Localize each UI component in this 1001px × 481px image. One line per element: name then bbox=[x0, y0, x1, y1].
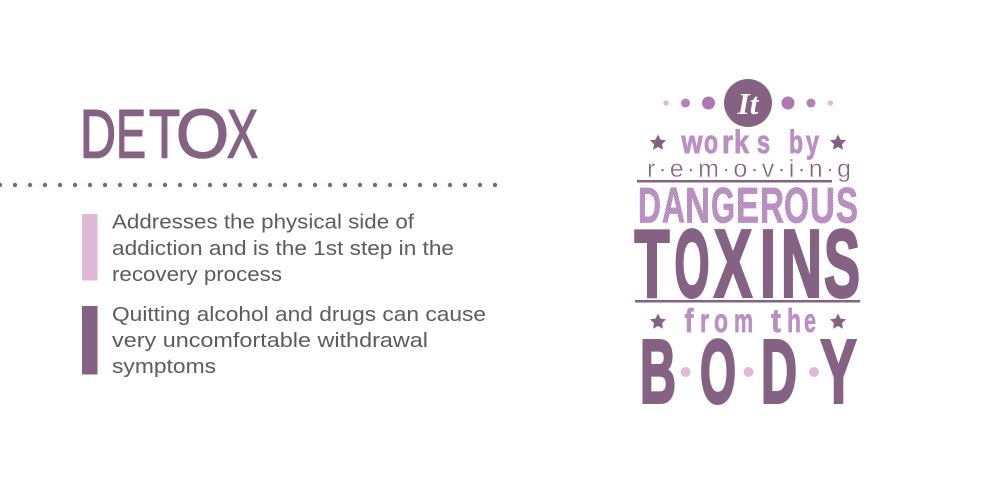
text: works by: o bbox=[704, 124, 718, 160]
text: DANGEROUS: N bbox=[685, 178, 710, 234]
text: from the: m bbox=[734, 302, 753, 339]
text: BODY: D bbox=[761, 322, 797, 422]
text: DANGEROUS: D bbox=[638, 178, 661, 234]
text: works by: k bbox=[734, 124, 749, 160]
icon: stars beside from the bbox=[650, 314, 846, 329]
text: from the: e bbox=[804, 302, 816, 339]
icon: circle badge with It bbox=[724, 79, 772, 127]
text: DANGEROUS: E bbox=[736, 178, 759, 234]
text: from the: h bbox=[787, 302, 801, 339]
heading: DETOX: E bbox=[116, 95, 146, 172]
text: works by: y bbox=[806, 124, 819, 160]
text: TOXINS: O bbox=[674, 210, 710, 318]
rule under TOXINS bbox=[635, 300, 860, 302]
icon: circle badge with It: It bbox=[737, 86, 760, 121]
bullet 2 text: very uncomfortable withdrawal bbox=[112, 330, 428, 352]
typographic poster bbox=[634, 79, 860, 422]
text: DANGEROUS: U bbox=[810, 178, 835, 234]
text: DANGEROUS: R bbox=[760, 178, 784, 234]
dark bar bbox=[82, 306, 98, 374]
heading: DETOX: T bbox=[149, 95, 180, 172]
text: works by: b bbox=[789, 124, 803, 160]
text: TOXINS: I bbox=[760, 210, 776, 318]
bullet 2 text: Quitting alcohol and drugs can cause bbox=[112, 304, 486, 326]
text: DANGEROUS: G bbox=[711, 178, 735, 234]
text: TOXINS: N bbox=[781, 210, 822, 318]
bullet 1 text: addiction and is the 1st step in the bbox=[112, 238, 454, 260]
bullet 1 text bbox=[112, 212, 454, 286]
text: TOXINS: S bbox=[824, 210, 860, 318]
text: BODY: B bbox=[640, 322, 676, 422]
bullet 2 text: symptoms bbox=[112, 356, 216, 378]
dotted divider bbox=[0, 183, 497, 187]
text: TOXINS: T bbox=[634, 210, 670, 318]
heading: DETOX: X bbox=[227, 95, 258, 172]
text: from the: f bbox=[684, 302, 694, 339]
bullet 2 bbox=[82, 304, 486, 378]
rule under removing bbox=[637, 180, 832, 182]
heading: DETOX bbox=[80, 95, 258, 172]
bullet 2 text bbox=[112, 304, 486, 378]
text: DANGEROUS: S bbox=[836, 178, 858, 234]
text: from the: t bbox=[771, 302, 781, 339]
light bar bbox=[82, 214, 98, 280]
text: TOXINS: X bbox=[714, 210, 752, 318]
text: works by: r bbox=[722, 124, 733, 160]
text: DANGEROUS: A bbox=[662, 178, 685, 234]
heading: DETOX: D bbox=[80, 95, 116, 172]
text: works by: w bbox=[681, 124, 703, 160]
text: removing: r·e·m·o·v·i·n·g bbox=[647, 155, 851, 183]
text: BODY bbox=[640, 322, 856, 422]
text: BODY: Y bbox=[820, 322, 856, 422]
text: works by bbox=[681, 124, 819, 160]
heading: DETOX: O bbox=[176, 95, 229, 172]
text: DANGEROUS bbox=[638, 178, 858, 234]
text: from the: r bbox=[700, 302, 709, 339]
text: TOXINS bbox=[634, 210, 860, 318]
text: DANGEROUS: O bbox=[784, 178, 809, 234]
text: BODY: O bbox=[700, 322, 736, 422]
text: from the bbox=[684, 302, 816, 339]
text: works by: s bbox=[757, 124, 770, 160]
bullet 1 text: Addresses the physical side of bbox=[112, 212, 414, 234]
bullet 1 bbox=[82, 212, 454, 286]
decorative dots row bbox=[663, 96, 833, 110]
dots between BODY letters bbox=[680, 367, 819, 377]
bullet 1 text: recovery process bbox=[112, 264, 282, 286]
icon: stars beside works by bbox=[650, 134, 846, 150]
text: from the: o bbox=[714, 302, 728, 339]
